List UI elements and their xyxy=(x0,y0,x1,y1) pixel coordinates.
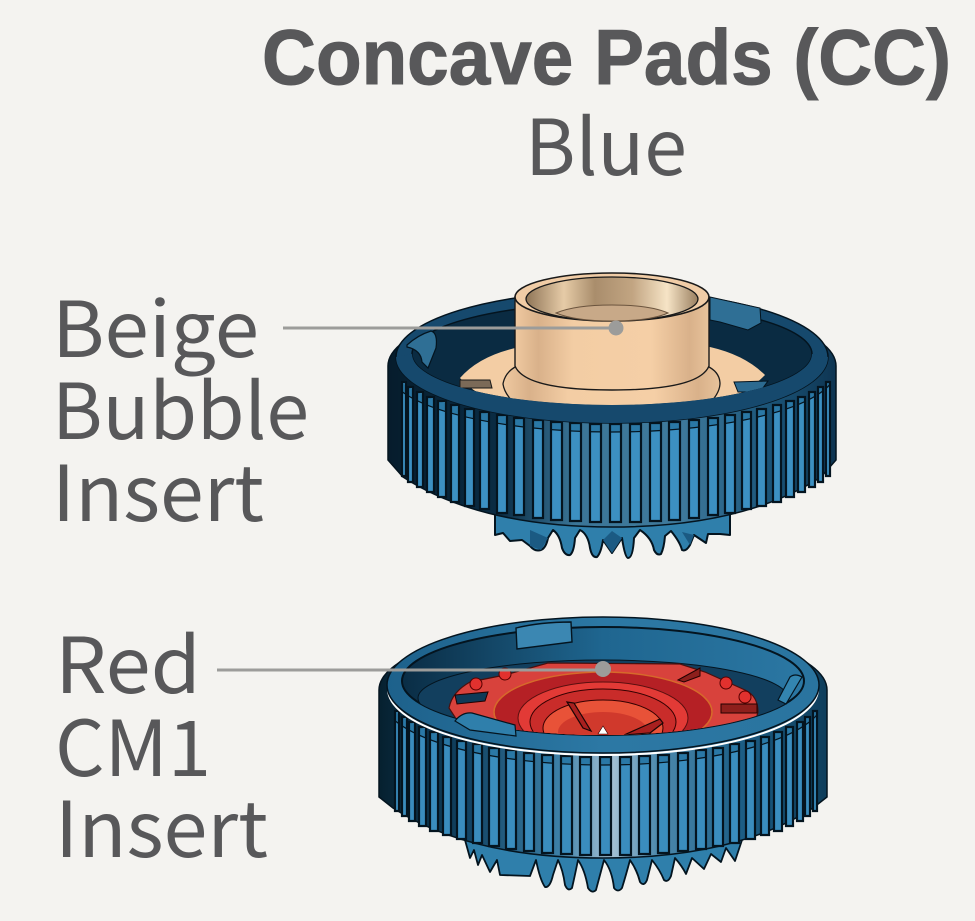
cavity floor xyxy=(418,660,788,736)
bottom gear rim xyxy=(387,617,819,753)
label: red CM1 insert xyxy=(55,605,268,880)
left tab xyxy=(407,331,436,368)
beige plate xyxy=(460,347,768,410)
plate bumps xyxy=(470,678,482,690)
red dish rings xyxy=(493,671,713,735)
top gear cavity xyxy=(412,303,812,405)
top gear outer wall xyxy=(388,300,836,527)
red plate xyxy=(449,663,758,740)
label: beige bubble insert: Bubble xyxy=(52,351,309,462)
back rim tab xyxy=(516,622,572,649)
leader line: beige bubble xyxy=(283,320,624,336)
right rim tab xyxy=(778,675,802,704)
title: Concave Pads (CC) xyxy=(262,13,951,101)
right tab xyxy=(710,297,761,330)
top gear rim xyxy=(396,291,828,423)
bubble inner floor xyxy=(556,305,668,321)
dish blades xyxy=(567,702,591,731)
bubble top ring xyxy=(515,273,709,321)
bottom gear outer wall xyxy=(379,624,827,858)
bottom gear teeth xyxy=(394,710,818,856)
white pointer xyxy=(598,726,608,734)
bottom gear cavity xyxy=(402,627,804,735)
top gear: blue pad with beige bubble insert xyxy=(388,273,836,558)
label: red CM1 insert: Red xyxy=(55,605,201,716)
leader line: red CM1 xyxy=(217,661,611,677)
label: beige bubble insert xyxy=(52,269,309,544)
label: red CM1 insert: CM1 xyxy=(55,688,211,799)
label: red CM1 insert: Insert xyxy=(55,769,268,880)
red insert xyxy=(448,662,759,735)
label: beige bubble insert: Beige xyxy=(52,269,259,380)
top gear lower spike facets xyxy=(530,530,694,553)
subtitle: Blue xyxy=(525,87,687,198)
bottom gear lower spikes xyxy=(465,840,742,892)
white rim highlight xyxy=(388,689,818,755)
bubble inner wall xyxy=(526,277,698,321)
label: beige bubble insert: Insert xyxy=(52,433,264,544)
bubble cylinder xyxy=(515,297,709,390)
front rim cover xyxy=(396,354,828,423)
plate slots xyxy=(455,692,488,704)
top gear teeth xyxy=(400,380,832,524)
front rim tab xyxy=(455,713,516,736)
bottom gear: blue pad with red CM1 insert xyxy=(379,617,827,892)
top gear lower spikes xyxy=(495,512,730,558)
